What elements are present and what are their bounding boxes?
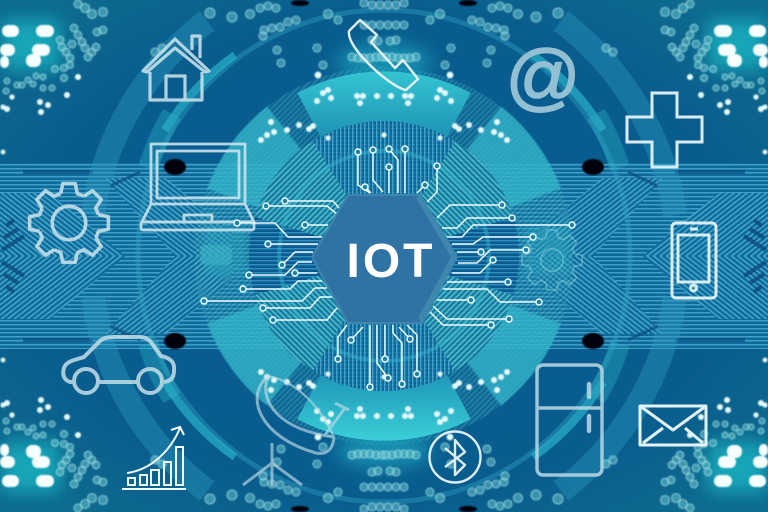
smartphone icon xyxy=(672,223,716,298)
car icon xyxy=(63,337,174,393)
bluetooth icon xyxy=(430,432,480,482)
background: side patches xyxy=(200,225,570,275)
satellite dish icon xyxy=(243,376,349,486)
at sign icon: @ xyxy=(505,35,581,118)
chip traces xyxy=(204,149,572,387)
IOT title: IOT xyxy=(346,235,436,288)
growth chart icon xyxy=(122,427,186,489)
background: central circuit disc xyxy=(248,120,520,392)
chip trace end rings xyxy=(201,146,575,390)
laptop icon xyxy=(141,144,254,230)
phone handset icon xyxy=(349,20,418,90)
envelope icon xyxy=(640,406,706,445)
faint gear on right of chip xyxy=(522,230,582,290)
background: cyan ring segments xyxy=(233,44,535,468)
gear icon xyxy=(30,184,108,262)
refrigerator icon xyxy=(537,365,602,475)
background: black via holes xyxy=(164,0,604,512)
hexagon chip xyxy=(312,195,457,323)
house icon xyxy=(143,36,209,100)
background: ring arcs xyxy=(93,10,675,502)
medical cross icon xyxy=(627,93,702,167)
background: circuit band xyxy=(0,163,768,349)
